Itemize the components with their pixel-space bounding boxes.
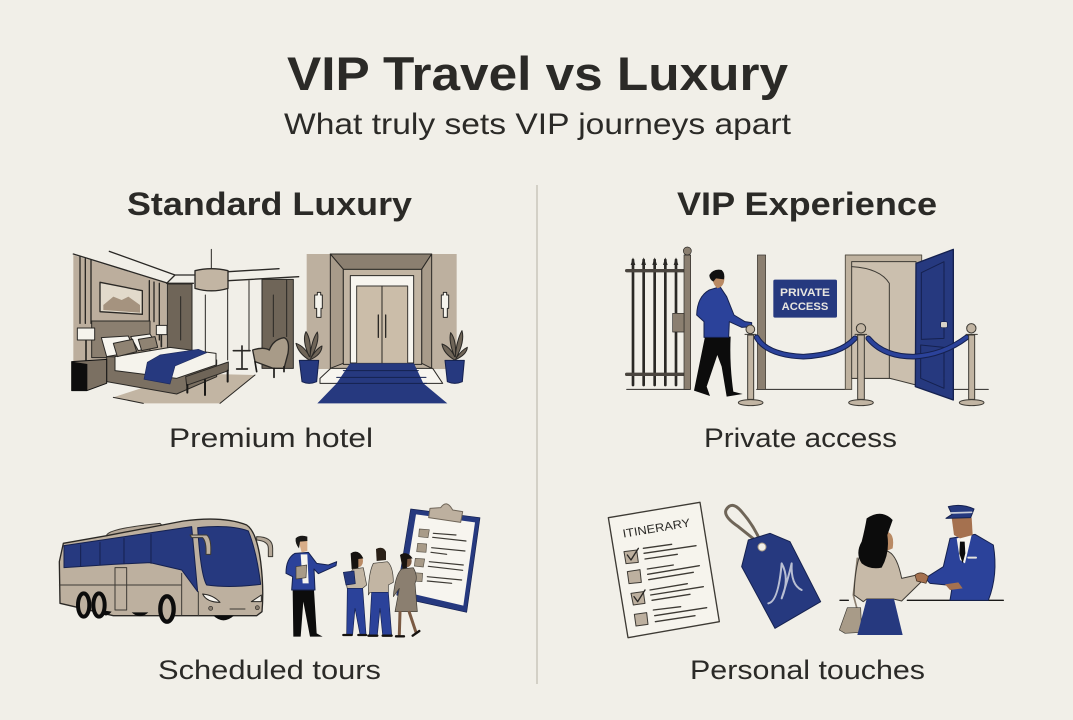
handshake <box>915 573 928 583</box>
man in navy jacket <box>694 270 752 397</box>
luggage tag <box>726 505 821 628</box>
sign: private access: PRIVATE <box>780 287 830 299</box>
velvet ropes <box>757 337 855 357</box>
wall art <box>100 282 142 314</box>
itinerary sheet <box>608 502 719 638</box>
tour bus <box>59 519 273 622</box>
headboard <box>92 321 150 358</box>
illustration: private access <box>627 247 988 406</box>
bench <box>186 362 228 385</box>
guest woman <box>839 514 921 635</box>
rug <box>113 373 255 403</box>
label: Private access: Private access <box>704 423 897 453</box>
armchair <box>253 338 288 368</box>
sign: private access: ACCESS <box>782 301 829 313</box>
bedroom <box>72 249 299 403</box>
tour clipboard <box>397 504 480 612</box>
wall sconces <box>315 292 449 317</box>
potted plants <box>296 332 322 360</box>
pendant lamp <box>210 249 213 269</box>
illustration: scheduled tours <box>59 504 480 637</box>
open doorway <box>845 255 922 389</box>
label: Scheduled tours: Scheduled tours <box>158 655 381 685</box>
tourists group <box>343 548 419 636</box>
hotel entrance <box>296 254 467 403</box>
sign: private access <box>773 280 837 318</box>
navy carpet <box>317 363 447 403</box>
brass stanchions <box>738 324 984 406</box>
illustration: premium hotel <box>72 249 467 403</box>
steps <box>320 368 443 383</box>
label: Premium hotel: Premium hotel <box>169 423 373 453</box>
itinerary sheet: ITINERARY <box>622 516 691 541</box>
navy door <box>915 249 953 400</box>
nightstand <box>72 359 107 391</box>
lamps <box>86 334 161 360</box>
concierge <box>915 505 995 600</box>
title: VIP Travel vs Luxury <box>287 47 788 100</box>
bed <box>107 357 217 394</box>
subtitle: What truly sets VIP journeys apart <box>284 108 792 141</box>
tour guide <box>286 536 337 637</box>
iron gate <box>627 247 691 389</box>
heading: VIP Experience: VIP Experience <box>677 186 937 222</box>
heading: Standard Luxury: Standard Luxury <box>127 186 412 222</box>
ground line <box>627 388 988 391</box>
counter line <box>840 598 1003 602</box>
illustration: personal touches <box>608 502 1003 638</box>
wooden post <box>757 255 766 389</box>
curtains <box>167 279 293 368</box>
side table <box>233 346 250 369</box>
label: Personal touches: Personal touches <box>690 655 925 685</box>
